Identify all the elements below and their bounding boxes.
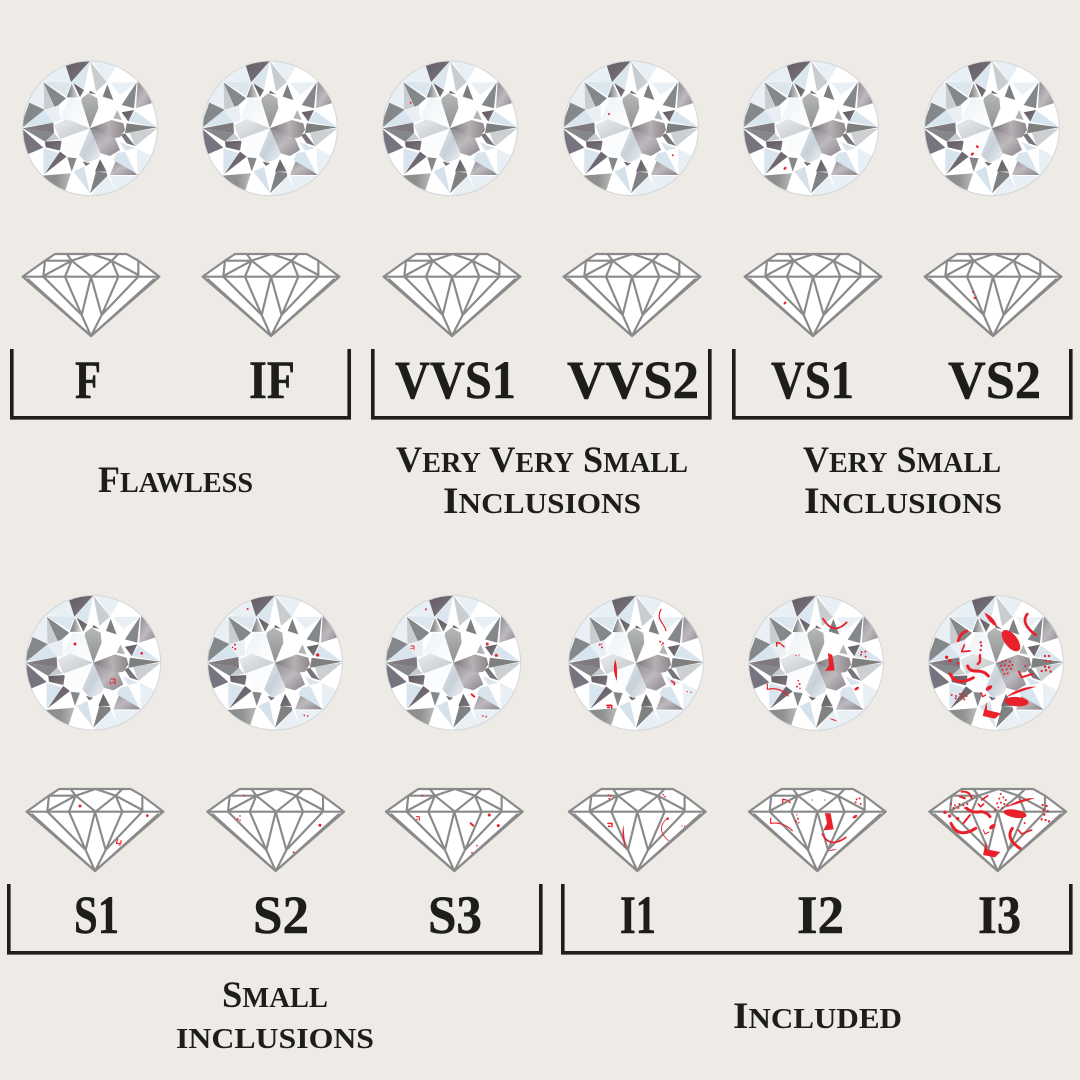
diamond top view: S2	[205, 593, 342, 733]
diamond side view: I1	[569, 789, 706, 871]
grade label F: F	[75, 350, 101, 410]
diamond top view: VVS2	[561, 58, 698, 198]
diamond top view: VS2	[922, 58, 1059, 198]
panel: round diamond top views, upper row	[20, 58, 1059, 198]
diamond side view: S3	[386, 789, 523, 871]
category label: Flawless: FLAWLESS	[98, 460, 253, 501]
category label: Very Small Inclusions: VERY SMALL	[803, 440, 1001, 481]
diamond side view: I2	[749, 789, 886, 871]
diamond side view: F	[23, 254, 159, 336]
bracket group: Included	[563, 884, 1071, 953]
grade label I3: I3	[978, 885, 1021, 945]
bracket group: Very Small Inclusions	[734, 349, 1071, 418]
diamond side view: VVS2	[564, 254, 700, 336]
category label: Included: INCLUDED	[733, 996, 902, 1037]
grade label VVS1: VVS1	[395, 350, 516, 410]
grade label I1: I1	[620, 885, 656, 945]
diamond side view: S2	[207, 789, 344, 871]
diamond top view: I2	[746, 593, 883, 733]
panel: diamond side views, lower row	[27, 789, 1066, 871]
diamond top view: IF	[200, 58, 337, 198]
category label: Very Small Inclusions: INCLUSIONS	[804, 481, 1002, 522]
diamond top view: F	[20, 58, 157, 198]
panel: diamond side views, upper row	[23, 254, 1061, 336]
diamond top view: S3	[383, 593, 521, 733]
grade label VVS2: VVS2	[567, 350, 699, 410]
category label: Small inclusions	[176, 975, 374, 1055]
bracket group: Flawless	[12, 349, 349, 418]
category label: Very Very Small Inclusions	[396, 440, 688, 522]
diamond side view: S1	[27, 789, 163, 871]
diamond top view: I3	[926, 593, 1063, 733]
category label: Small inclusions: SMALL	[222, 975, 328, 1016]
diamond top view: VS1	[741, 58, 878, 198]
diamond side view: IF	[203, 254, 339, 336]
bracket group: Very Very Small Inclusions	[373, 349, 710, 418]
diamond top view: I1	[566, 593, 703, 733]
grade label I2: I2	[797, 885, 844, 945]
bracket group: Small Inclusions	[9, 884, 541, 953]
grade label VS2: VS2	[948, 350, 1041, 410]
grade label IF: IF	[249, 350, 295, 410]
category label: Small inclusions: INCLUSIONS	[176, 1023, 374, 1055]
category label: Very Very Small Inclusions: VERY VERY SMALL	[396, 440, 688, 481]
grade label S2: S2	[253, 885, 309, 945]
diamond side view: I3	[929, 789, 1066, 871]
diamond top view: VVS1	[380, 58, 517, 198]
diamond side view: VS1	[745, 254, 881, 336]
category label: Very Small Inclusions	[803, 440, 1002, 522]
category label: Very Very Small Inclusions: INCLUSIONS	[443, 481, 641, 522]
grade label S1: S1	[74, 885, 119, 945]
grade label VS1: VS1	[771, 350, 854, 410]
panel: round diamond top views, lower row	[23, 593, 1063, 733]
diamond side view: VS2	[925, 254, 1061, 336]
diamond top view: S1	[23, 593, 161, 733]
grade label S3: S3	[428, 885, 482, 945]
diamond side view: VVS1	[384, 254, 520, 336]
